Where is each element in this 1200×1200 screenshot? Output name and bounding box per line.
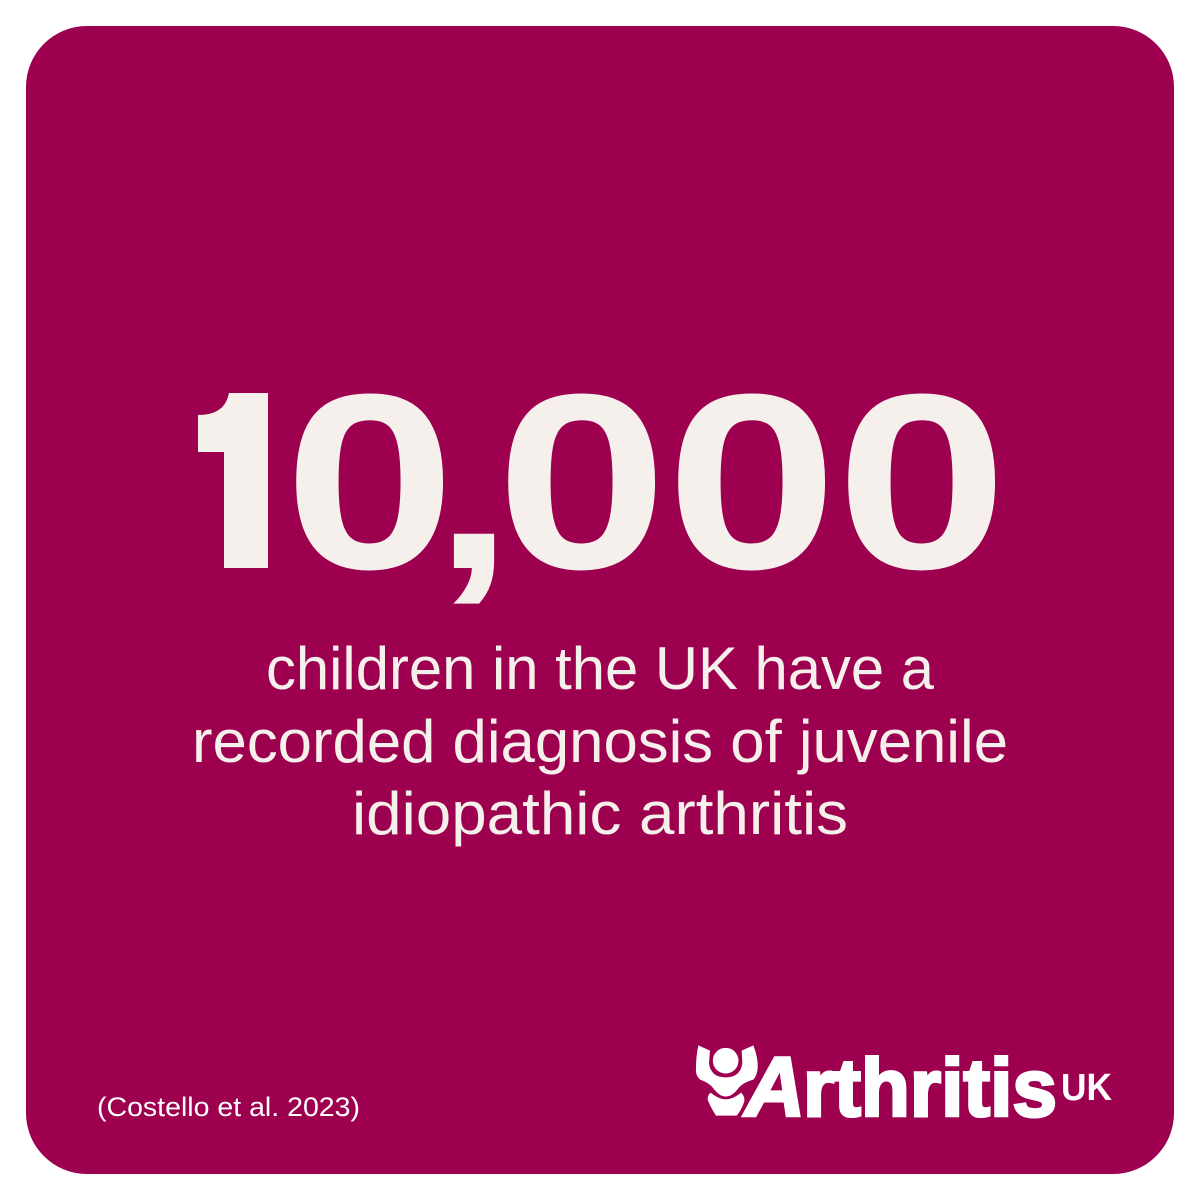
citation: (Costello et al. 2023): [97, 1092, 360, 1122]
headline number: ,: [434, 360, 513, 617]
headline number: 0: [666, 342, 838, 621]
headline number: 0: [284, 342, 456, 621]
headline number: 0: [836, 342, 1008, 621]
logo: Arthritis UK: [696, 1040, 1113, 1134]
description text: [192, 635, 1008, 847]
headline number: 0: [496, 342, 668, 621]
logo wordmark: UK: [1061, 1067, 1113, 1109]
logo wordmark: A: [743, 1040, 805, 1134]
description text: children in the UK have a: [266, 635, 935, 702]
logo wordmark: rthritis: [803, 1043, 1057, 1134]
description text: idiopathic arthritis: [352, 780, 848, 847]
icon: figure with raised arms: [696, 1045, 758, 1116]
logo wordmark: [743, 1040, 1113, 1134]
headline number: 1: [158, 336, 330, 623]
headline number: [198, 393, 996, 604]
description text: recorded diagnosis of juvenile: [192, 708, 1008, 775]
